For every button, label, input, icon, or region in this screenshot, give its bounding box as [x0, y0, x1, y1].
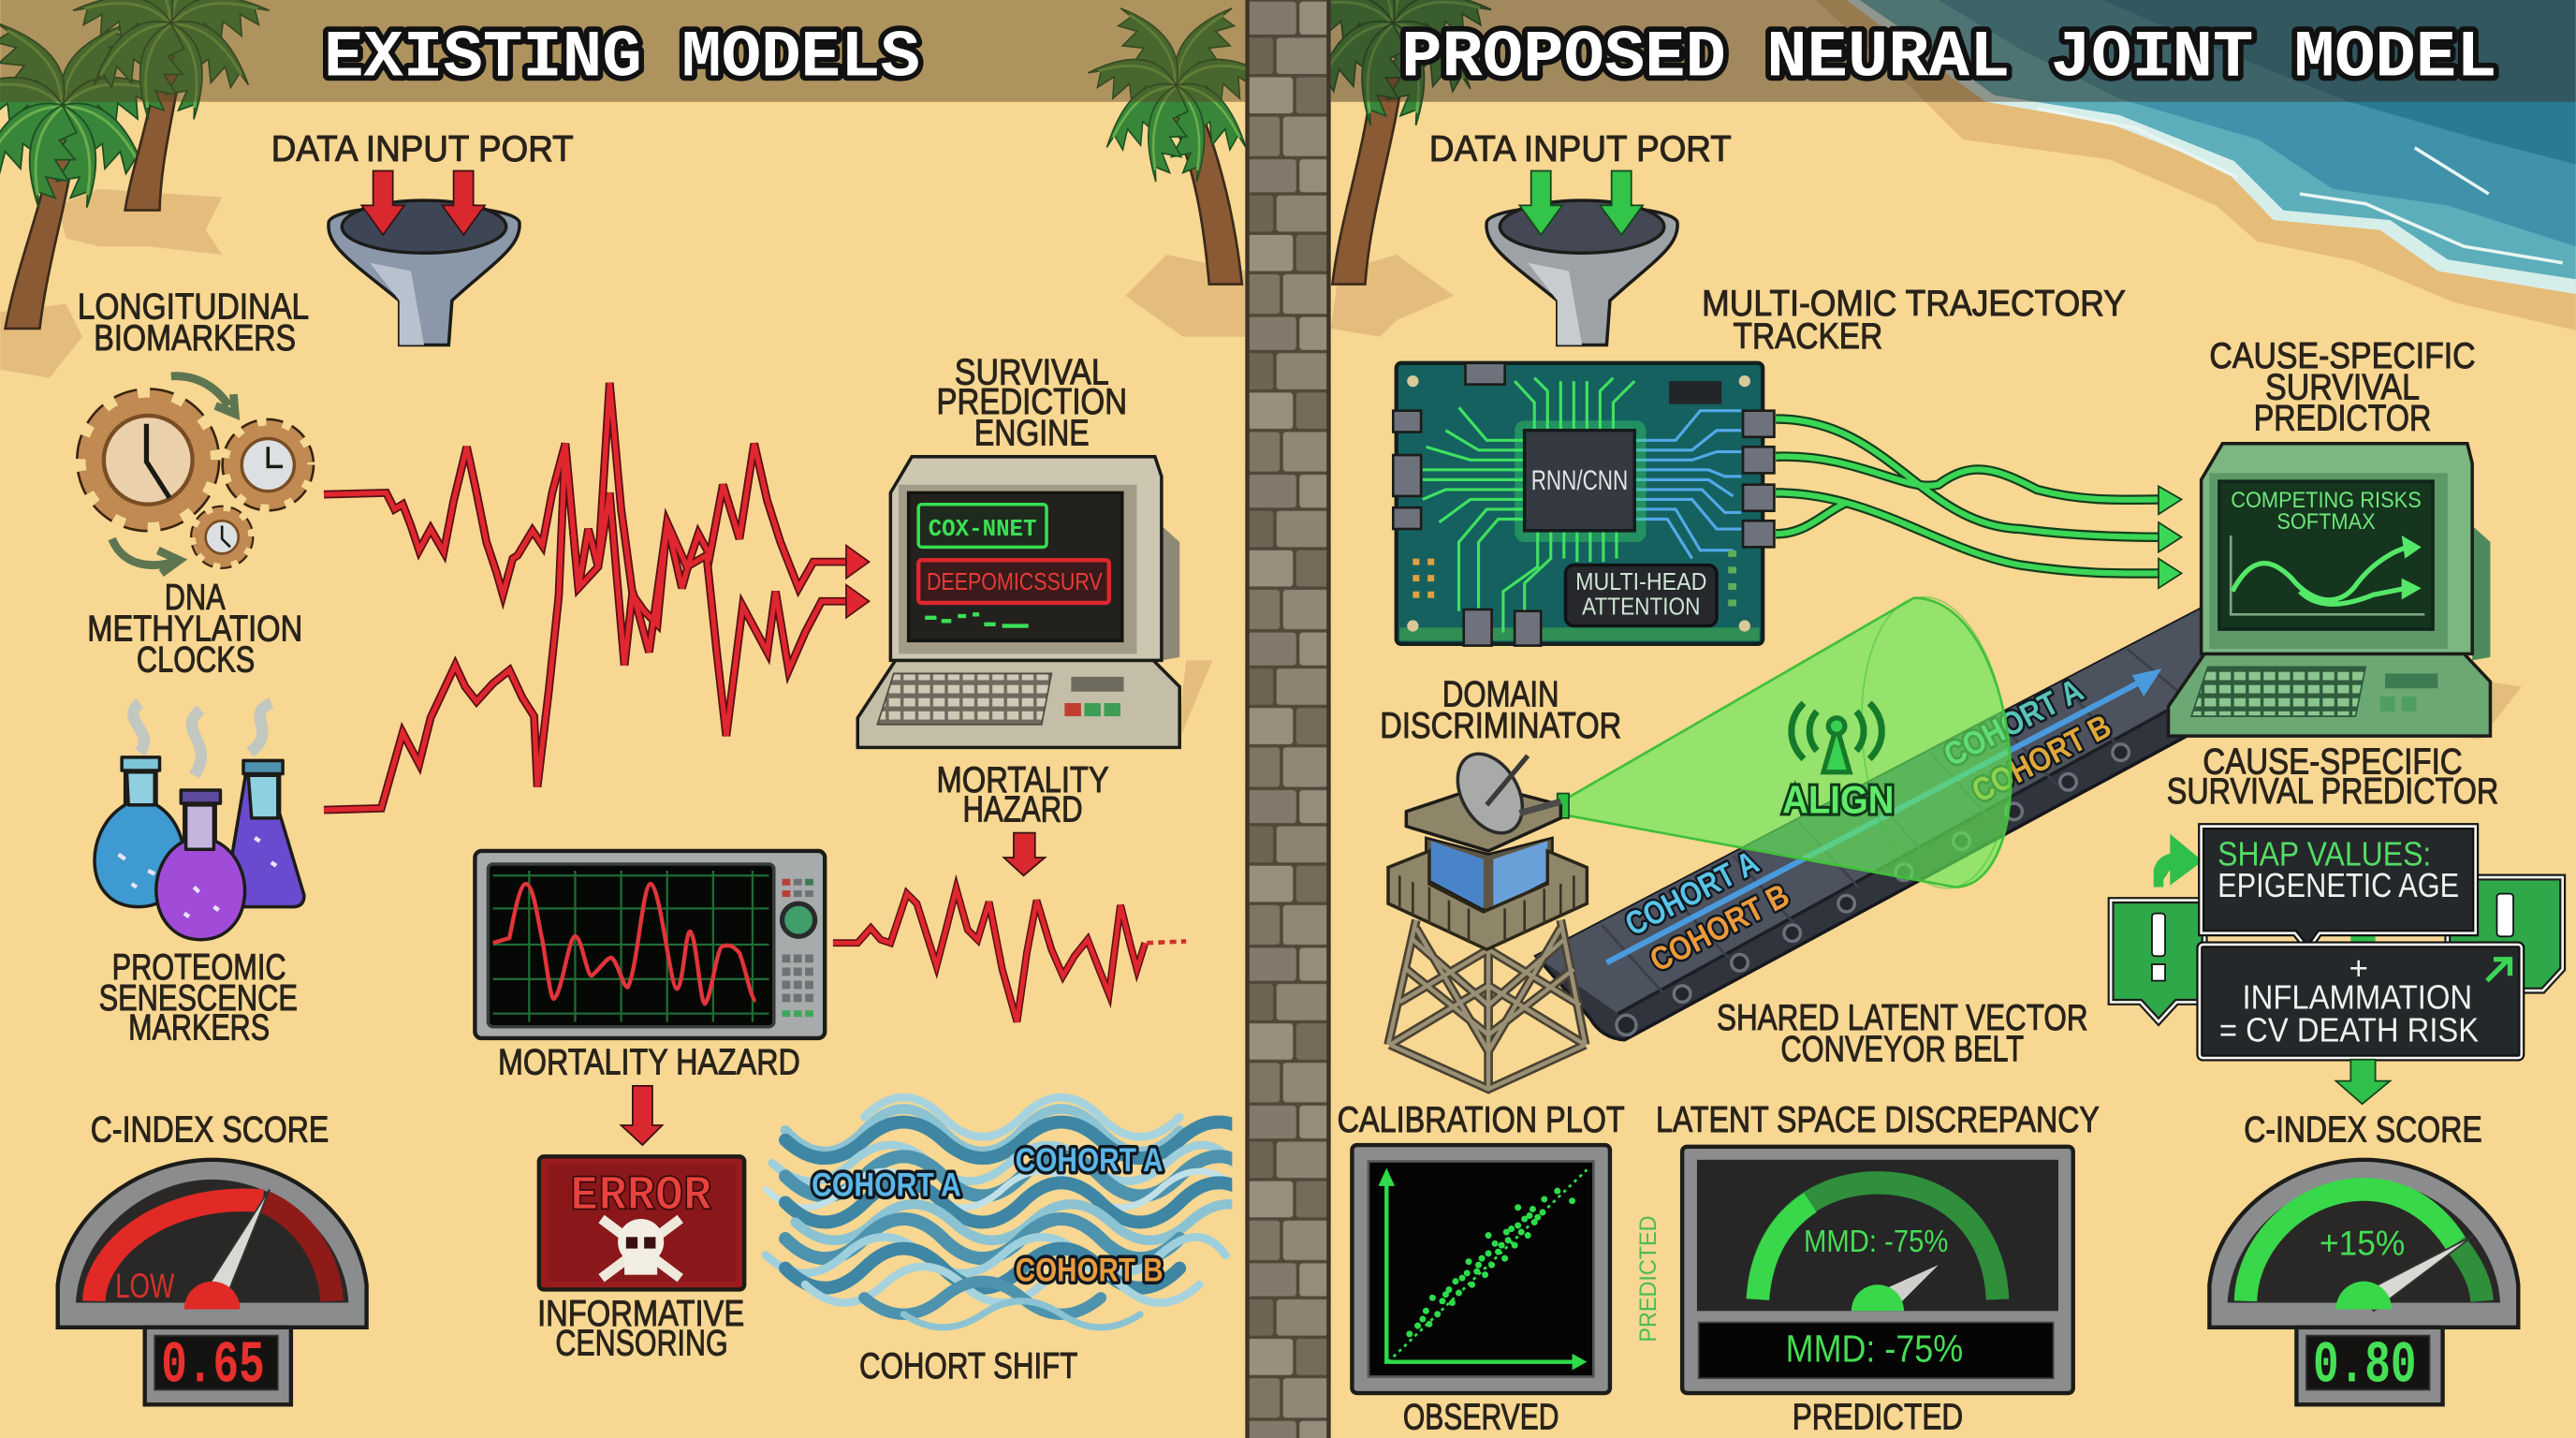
label: predicted axis: PREDICTED	[1636, 1215, 1661, 1343]
stone wall divider	[1245, 0, 1331, 1438]
attention block: ATTENTION	[1582, 594, 1700, 620]
label: c-index score left: C-INDEX SCORE	[91, 1110, 329, 1151]
label: survival prediction engine: SURVIVAL	[955, 353, 1109, 393]
arrow down	[2336, 1060, 2390, 1104]
small gear clock	[196, 511, 248, 564]
grid	[493, 871, 769, 1021]
warning bubble left	[2111, 901, 2204, 1021]
error panel	[539, 1156, 744, 1289]
label: mortality hazard upper: MORTALITY	[936, 760, 1109, 800]
indigo flask	[226, 760, 304, 907]
label: align: ALIGN	[1782, 778, 1894, 822]
cohort labels in waves: COHORT B	[1016, 1253, 1164, 1289]
computer: survival prediction engine	[857, 457, 1212, 747]
belt slats	[1602, 649, 2188, 992]
inflammation box: INFLAMMATION	[2242, 977, 2472, 1016]
shared latent vector conveyor belt	[1536, 609, 2211, 1040]
hazard trace	[493, 884, 755, 1004]
model tag: cox-nnet	[918, 505, 1046, 547]
label: domain discriminator: DOMAIN	[1442, 675, 1559, 715]
scatter points	[1406, 1188, 1575, 1337]
arrowheads	[846, 546, 870, 618]
label: survival prediction engine: ENGINE	[974, 414, 1090, 454]
purple flask	[156, 790, 245, 940]
label: informative censoring: INFORMATIVE	[537, 1294, 744, 1334]
panel buttons	[783, 879, 813, 1017]
icon: funnel right	[1486, 170, 1677, 345]
model tag: deepomicssurv: DEEPOMICSSURV	[927, 569, 1103, 595]
gauge: c-index low	[58, 1160, 367, 1404]
label: c-index score right: C-INDEX SCORE	[2244, 1110, 2482, 1151]
label: dna methylation clocks	[87, 578, 302, 681]
blue flask	[95, 757, 184, 907]
attention block	[1566, 565, 1717, 626]
computer: cause-specific predictor	[2169, 444, 2490, 736]
shap box	[2202, 827, 2476, 949]
chip glow	[1515, 420, 1647, 542]
header band right	[1331, 0, 2576, 102]
green alignment beam	[1558, 590, 2022, 896]
label: proteomic senescence markers: PROTEOMIC	[112, 947, 286, 988]
label: proteomic senescence markers: MARKERS	[128, 1008, 270, 1049]
label: proteomic senescence markers: SENESCENCE	[99, 978, 298, 1019]
model tag: cox-nnet: COX-NNET	[929, 515, 1037, 543]
label: informative censoring: CENSORING	[555, 1324, 728, 1364]
label: shared latent vector conveyor belt	[1717, 998, 2088, 1070]
belt cohort labels: COHORT A	[1939, 671, 2089, 774]
arrow: to error	[622, 1086, 662, 1145]
cohort labels in waves	[812, 1142, 1164, 1289]
calibration plot screen	[1352, 1145, 1610, 1393]
icon: science flasks	[95, 703, 304, 940]
shap box: EPIGENETIC AGE	[2217, 866, 2459, 904]
cabin	[1426, 838, 1553, 912]
computer: cause-specific predictor: COMPETING RISKS	[2231, 489, 2422, 513]
blue traces	[1634, 411, 1741, 559]
noisy red hazard wave	[833, 888, 1186, 1021]
label: survival prediction engine: PREDICTION	[936, 382, 1127, 422]
attention block: MULTI-HEAD	[1575, 569, 1706, 595]
title: proposed neural joint model: PROPOSED NEURAL JOINT MODEL	[1401, 22, 2496, 96]
label: longitudinal biomarkers	[78, 286, 309, 359]
label: dna methylation clocks: CLOCKS	[137, 640, 255, 681]
keyboard	[2191, 667, 2365, 716]
label: cause-specific survival predictor upper: PREDICTOR	[2254, 399, 2431, 439]
inflammation box: = CV DEATH RISK	[2219, 1010, 2479, 1049]
latent discrepancy gauge panel: MMD: -75%	[1804, 1225, 1948, 1259]
keyboard	[877, 673, 1051, 725]
model tag: deepomicssurv	[918, 560, 1109, 603]
arrows into funnel	[361, 170, 485, 235]
error panel: ERROR	[570, 1167, 711, 1224]
header band left	[0, 0, 1245, 102]
cycle arrows	[112, 376, 235, 573]
roof	[1406, 785, 1560, 851]
green traces	[1423, 378, 1634, 633]
label: cause-specific survival predictor upper: SURVIVAL	[2265, 367, 2420, 407]
label: dna methylation clocks: DNA	[165, 578, 226, 618]
terminal screen	[909, 492, 1122, 640]
connector	[2350, 920, 2376, 956]
components	[1393, 363, 1774, 646]
icon: align antenna signal	[1792, 703, 1881, 772]
rollers	[1617, 744, 2129, 1034]
sand shadows of the palms	[0, 189, 2522, 740]
legs and braces	[1388, 920, 1586, 1089]
label: cause-specific survival predictor lower: CAUSE-SPECIFIC	[2203, 741, 2463, 782]
computer: cause-specific predictor: SOFTMAX	[2276, 510, 2376, 535]
label: data input port right: DATA INPUT PORT	[1429, 129, 1732, 169]
label: longitudinal biomarkers: BIOMARKERS	[94, 318, 296, 359]
label: cause-specific survival predictor lower: SURVIVAL PREDICTOR	[2167, 771, 2498, 812]
label: predicted: PREDICTED	[1793, 1398, 1963, 1438]
knob	[783, 903, 815, 936]
inflammation box	[2200, 945, 2522, 1058]
label: cause-specific survival predictor lower	[2167, 741, 2498, 812]
softmax screen	[2219, 481, 2433, 629]
belt cohort labels	[1619, 671, 2117, 979]
arrow: hazard down	[1003, 833, 1045, 875]
ocean and shoreline	[1815, 0, 2576, 330]
platform railing	[1388, 851, 1587, 949]
label: mortality hazard lower: MORTALITY HAZARD	[498, 1043, 800, 1083]
palm tree by wall right	[1290, 0, 1496, 285]
monitor: hazard oscilloscope	[475, 851, 825, 1038]
warning bubble right	[2448, 877, 2563, 990]
palm tree by wall left	[1084, 0, 1269, 285]
cohort labels in waves: COHORT A	[1016, 1142, 1164, 1179]
axes	[1386, 1175, 1580, 1362]
wave bands	[766, 1097, 1268, 1328]
label: mortality hazard upper: HAZARD	[963, 789, 1083, 829]
palm tree far left	[0, 7, 172, 329]
discriminator watch tower	[1388, 742, 1587, 1089]
cohort labels in waves: COHORT A	[812, 1167, 961, 1203]
label: longitudinal biomarkers: LONGITUDINAL	[78, 286, 309, 327]
chip	[1525, 431, 1634, 531]
radar dish	[1444, 742, 1560, 844]
label: proteomic senescence markers	[99, 947, 298, 1049]
latent discrepancy gauge panel: MMD: -75%	[1786, 1328, 1963, 1371]
title: existing models: EXISTING MODELS	[324, 22, 920, 96]
latent discrepancy gauge panel	[1682, 1147, 2073, 1393]
label: multi-omic trajectory tracker: MULTI-OMIC TRAJECTORY	[1702, 284, 2126, 324]
label: shared latent vector conveyor belt: SHARED LATENT VECTOR	[1717, 998, 2088, 1038]
stream arrowheads	[2159, 486, 2182, 588]
circuit board: multi-omic tracker: RNN/CNN	[1531, 465, 1628, 496]
shap explanation cluster	[2111, 827, 2563, 1104]
red tangled biomarker trajectories	[324, 383, 870, 810]
readout 0.80: 0.80	[2313, 1332, 2416, 1400]
label: mortality hazard upper	[936, 760, 1109, 829]
shap box: SHAP VALUES:	[2217, 835, 2431, 873]
icon: skull and crossbones	[602, 1219, 681, 1278]
label: multi-omic trajectory tracker: TRACKER	[1734, 316, 1882, 357]
label: cause-specific survival predictor upper	[2209, 336, 2476, 439]
label: data input port left: DATA INPUT PORT	[271, 129, 574, 169]
gauge: c-index high: +15%	[2320, 1225, 2405, 1263]
label: domain discriminator: DISCRIMINATOR	[1380, 706, 1621, 746]
cohort shift waves	[766, 1097, 1268, 1328]
label: multi-omic trajectory tracker	[1702, 284, 2126, 357]
label: survival prediction engine	[936, 353, 1127, 454]
green output streams	[1776, 418, 2182, 588]
icon: funnel left	[329, 170, 520, 345]
gauge: c-index high	[2209, 1160, 2518, 1404]
medium gear clock	[228, 425, 307, 505]
label: cause-specific survival predictor upper: CAUSE-SPECIFIC	[2209, 336, 2476, 376]
big gear clock	[86, 398, 211, 522]
label: informative censoring	[537, 1294, 744, 1364]
label: cohort shift: COHORT SHIFT	[859, 1346, 1077, 1387]
ideal diagonal	[1388, 1169, 1587, 1362]
belt cohort labels: COHORT A	[1619, 844, 1764, 943]
label: dna methylation clocks: METHYLATION	[87, 609, 302, 649]
label: domain discriminator	[1380, 675, 1621, 746]
label: latent space discrepancy: LATENT SPACE DISCREPANCY	[1656, 1100, 2100, 1140]
belt flow arrow	[1606, 680, 2144, 962]
readout 0.65: 0.65	[161, 1332, 265, 1400]
belt cohort labels: COHORT B	[1966, 708, 2117, 810]
palm tree left back	[68, 0, 274, 211]
inflammation box: +	[2349, 950, 2368, 987]
arrows into funnel	[1519, 170, 1643, 235]
icon: epigenetic clock gears	[86, 376, 307, 573]
circuit board: multi-omic tracker	[1393, 363, 1774, 646]
label: observed: OBSERVED	[1403, 1398, 1559, 1438]
belt cohort labels: COHORT B	[1644, 877, 1795, 979]
curved arrow	[2159, 844, 2195, 888]
label: calibration plot: CALIBRATION PLOT	[1338, 1100, 1625, 1140]
gauge: c-index low: LOW	[115, 1267, 174, 1305]
label: shared latent vector conveyor belt: CONVEYOR BELT	[1780, 1030, 2024, 1070]
steam	[133, 703, 271, 775]
